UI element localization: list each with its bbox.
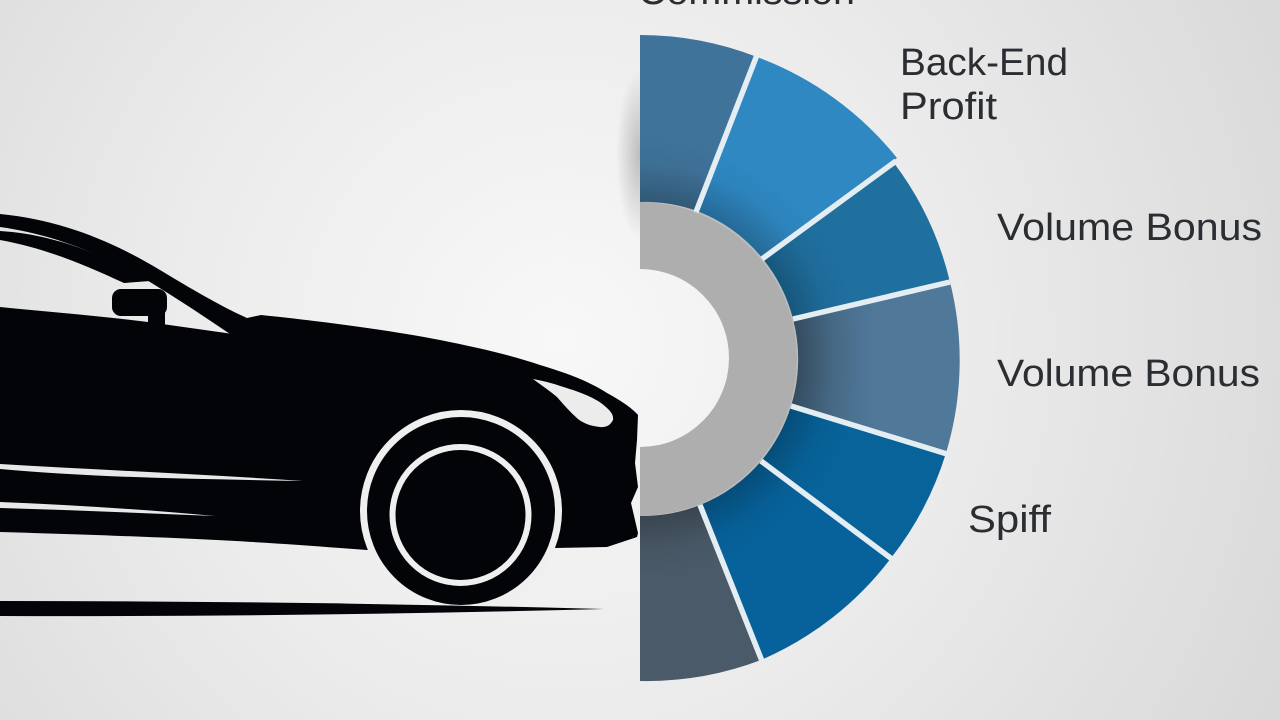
- label: back-end profit: Profit: [900, 86, 997, 128]
- inner shading: [640, 35, 963, 681]
- segment: commission: [640, 35, 757, 211]
- roof line: [0, 214, 247, 336]
- shadow beside fan: [616, 70, 664, 240]
- label: volume bonus upper: Volume Bonus: [997, 207, 1262, 249]
- segment: spiff: [762, 406, 946, 558]
- body crease upper: [0, 464, 303, 481]
- grey ring: [640, 202, 797, 516]
- segment: back-end profit: [697, 57, 897, 259]
- segment: lower blue: [700, 460, 891, 660]
- segment: volume bonus upper: [763, 163, 950, 319]
- car silhouette: [0, 214, 638, 616]
- segment separators: [696, 55, 950, 661]
- inner window line: [0, 231, 150, 283]
- label: volume bonus lower: Volume Bonus: [997, 353, 1260, 395]
- wheel: [364, 414, 558, 608]
- segment: volume bonus lower: [791, 282, 960, 453]
- fan chart: [640, 35, 963, 681]
- headlight: [533, 379, 613, 427]
- label: spiff: Spiff: [968, 499, 1051, 541]
- car body: [0, 307, 638, 550]
- side mirror: [112, 289, 167, 327]
- body crease lower: [0, 502, 215, 516]
- ground shadow: [0, 601, 604, 616]
- label: back-end profit: [900, 42, 1068, 128]
- label: back-end profit: Back-End: [900, 42, 1068, 84]
- segment: lower slate: [640, 505, 761, 681]
